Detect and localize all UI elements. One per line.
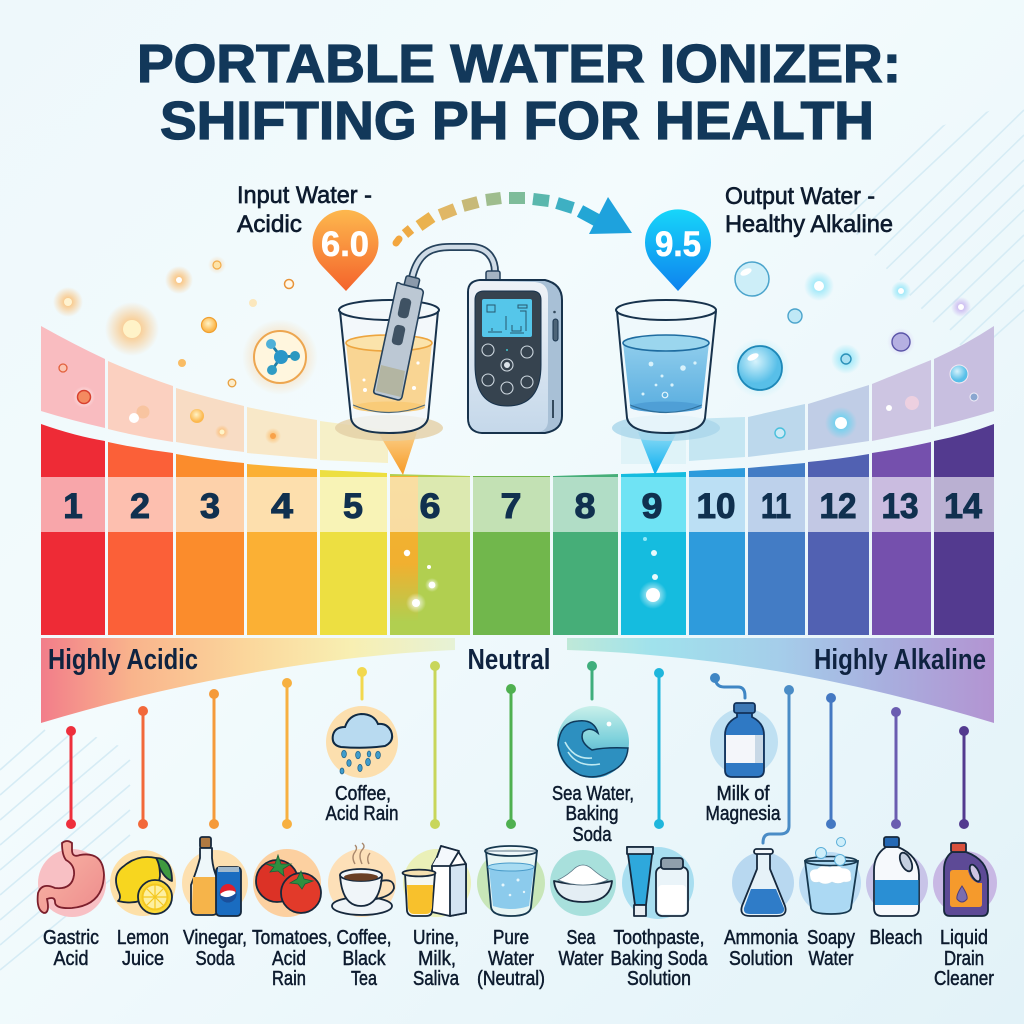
funnel to pH 9 [638, 432, 677, 475]
labels: substances: Cleaner [934, 968, 994, 990]
labels: substances: Urine, [413, 927, 459, 949]
icon: vinegar and soda [182, 837, 248, 916]
pH numbers: 13 [882, 487, 918, 526]
label: milk of magnesia: Magnesia [706, 803, 781, 825]
pin: output pH 9.5: 9.5 [655, 225, 701, 264]
ribbon: highly alkaline: Highly Alkaline [814, 644, 986, 676]
ribbon: highly acidic [41, 638, 455, 723]
icon: sea wave [557, 706, 629, 778]
funnel to pH 6 [378, 432, 417, 475]
icon: ionizer device [468, 271, 562, 433]
pH numbers: 1 [63, 487, 83, 526]
labels: substances: Sea [566, 927, 596, 949]
label: sea water, baking soda: Soda [572, 824, 612, 846]
input label [237, 182, 372, 238]
labels: substances: Water [488, 948, 534, 970]
label: neutral: Neutral [468, 644, 550, 676]
title: PORTABLE WATER IONIZER: [137, 34, 901, 94]
labels: substances: Lemon [117, 927, 169, 949]
labels: substances: Soapy [807, 927, 855, 949]
pH numbers [63, 487, 983, 526]
label: coffee, acid rain [326, 783, 398, 825]
labels: substances: Water [558, 948, 604, 970]
icon: sea salt bowl [550, 850, 616, 916]
icon: bleach jug [866, 837, 928, 916]
labels: substances: Tomatoes, [252, 927, 332, 949]
pH numbers: 5 [343, 487, 363, 526]
icon: pure water glass [477, 846, 545, 917]
pH numbers: 2 [130, 487, 150, 526]
icon: glass of alkaline water [612, 300, 720, 441]
labels: substances: Solution [729, 948, 793, 970]
label: sea water, baking soda [552, 783, 634, 846]
labels: substances: Acid [54, 948, 88, 970]
panel: faint upper pH wave [41, 326, 994, 464]
labels: substances: Milk, [418, 948, 456, 970]
labels: substances: Gastric [43, 927, 99, 949]
labels: substances: (Neutral) [477, 968, 545, 990]
icon: lemon [110, 850, 176, 916]
pin: output pH 9.5 [645, 209, 711, 291]
pH numbers: 11 [761, 487, 791, 526]
label: sea water, baking soda: Baking [566, 803, 618, 825]
labels: substances: Water [808, 948, 854, 970]
connector lines [68, 662, 968, 843]
input label: Input Water - [237, 182, 372, 209]
icon: tomatoes [253, 849, 321, 917]
label: coffee, acid rain: Acid Rain [326, 803, 398, 825]
labels: substances: Ammonia [724, 927, 799, 949]
labels: substances: Pure [493, 927, 529, 949]
pH numbers: 10 [696, 487, 736, 526]
icon: soapy water [799, 838, 861, 914]
labels: substances: Soda [196, 948, 235, 970]
labels: substances [43, 927, 994, 990]
icon: ionizer probe and cable [374, 247, 495, 400]
labels: substances: Liquid [940, 927, 988, 949]
labels: substances: Saliva [413, 968, 460, 990]
particles: acidic side [53, 256, 294, 444]
pH scale bars [41, 424, 994, 635]
pH numbers: 9 [642, 487, 662, 526]
labels: substances: Baking Soda [610, 948, 708, 970]
input label: Acidic [237, 211, 302, 238]
ribbon: highly alkaline [567, 638, 994, 723]
title [137, 34, 901, 151]
output label [725, 183, 893, 238]
icon: coffee cup [328, 843, 396, 917]
ribbon: highly acidic: Highly Acidic [48, 644, 198, 676]
pin: input pH 6.0 [313, 210, 378, 291]
pH numbers: 8 [574, 487, 596, 526]
pH numbers: 6 [420, 487, 440, 526]
icon: liquid drain cleaner [933, 843, 997, 916]
labels: substances: Solution [627, 968, 691, 990]
sparkles in pH bars [404, 537, 667, 613]
pH numbers: 3 [200, 487, 220, 526]
pH numbers: 12 [820, 487, 856, 526]
pH numbers: 7 [500, 487, 522, 526]
label: milk of magnesia: Milk of [716, 783, 770, 805]
icon: ammonia flask [732, 849, 794, 916]
icon: gastric acid stomach [38, 841, 106, 917]
icon: acid rain cloud [326, 706, 398, 778]
output label: Output Water - [725, 183, 875, 210]
labels: substances: Rain [272, 968, 306, 990]
icon: milk of magnesia bottle [710, 703, 778, 777]
labels: substances: Juice [122, 948, 164, 970]
output label: Healthy Alkaline [725, 211, 893, 238]
labels: substances: Black [342, 948, 386, 970]
label: milk of magnesia [706, 783, 781, 825]
pin: input pH 6.0: 6.0 [321, 225, 369, 264]
icon: urine, milk, saliva [402, 846, 471, 917]
title: SHIFTING PH FOR HEALTH [160, 91, 874, 151]
label: sea water, baking soda: Sea Water, [552, 783, 634, 805]
icon: glass of acidic water [335, 300, 443, 441]
labels: substances: Bleach [870, 927, 922, 949]
particles: alkaline side [730, 262, 978, 439]
pH numbers: 4 [271, 487, 294, 526]
labels: substances: Tea [351, 968, 378, 990]
labels: substances: Drain [944, 948, 984, 970]
labels: substances: Vinegar, [183, 927, 247, 949]
labels: substances: Toothpaste, [614, 927, 704, 949]
icon: molecule in bubble [242, 319, 318, 395]
pH numbers: 14 [944, 487, 983, 526]
icon: toothpaste and baking soda jar [622, 847, 694, 919]
labels: substances: Coffee, [336, 927, 392, 949]
label: coffee, acid rain: Coffee, [335, 783, 391, 805]
labels: substances: Acid [272, 948, 306, 970]
arrow: dashed arc from acidic to alkaline [396, 197, 632, 243]
